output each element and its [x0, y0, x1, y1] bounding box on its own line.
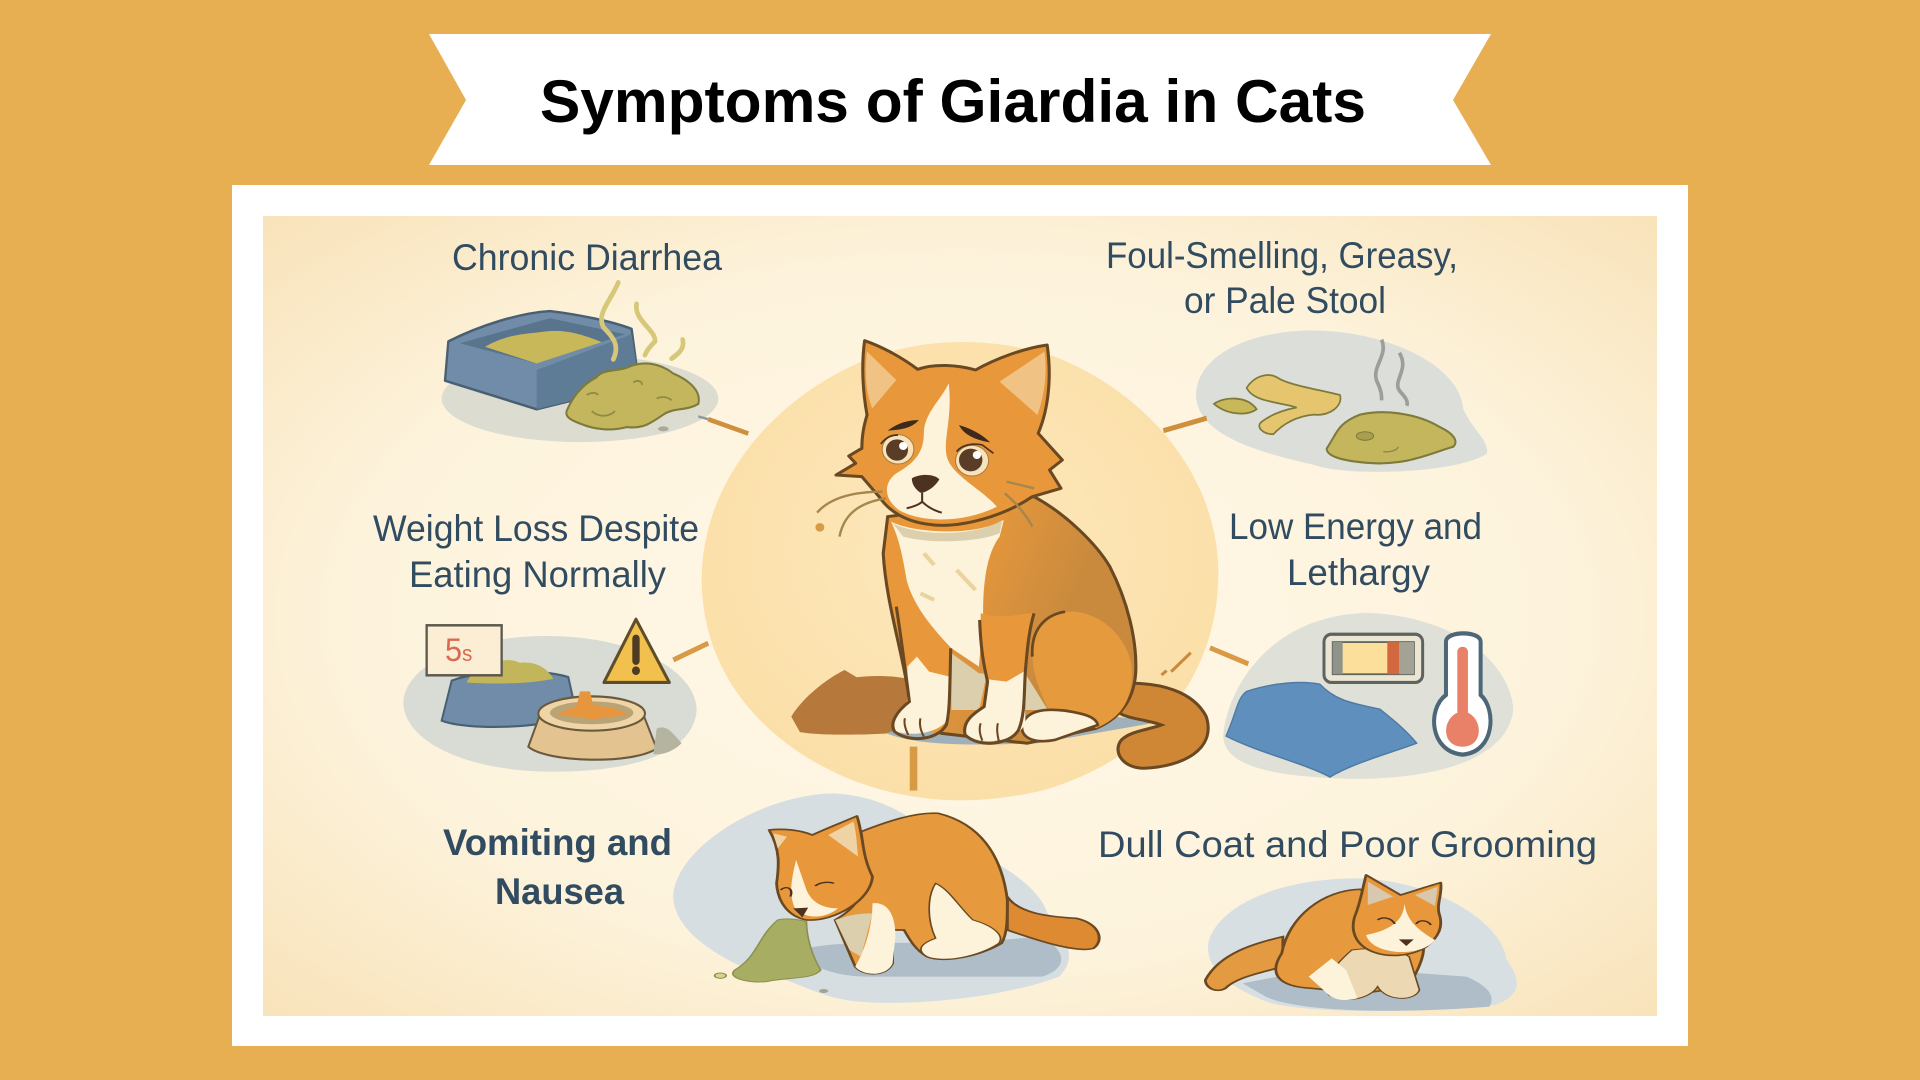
shadow	[801, 937, 1061, 977]
sign	[427, 625, 502, 675]
icon: vomiting cat	[673, 793, 1099, 1003]
head	[769, 816, 872, 920]
body	[835, 813, 1007, 974]
warning triangle	[604, 619, 669, 682]
icon: pale greasy stool	[1163, 330, 1487, 472]
symptom: vomiting	[443, 793, 1099, 1003]
symptom: low energy	[1210, 506, 1513, 779]
white frame panel	[232, 185, 1688, 1046]
label: foul stool: Foul-Smelling, Greasy,	[1106, 235, 1458, 276]
connector down	[903, 747, 925, 791]
icon: food bowls, sign and warning: 5s	[445, 631, 472, 668]
floor shadow	[886, 717, 1161, 745]
white face	[887, 383, 997, 519]
pillow	[1226, 683, 1417, 777]
chest marks	[920, 553, 976, 600]
left front leg	[898, 613, 951, 733]
nose and mouth	[907, 475, 942, 513]
inner ears	[866, 352, 1046, 415]
tail	[1007, 897, 1099, 949]
stool pile	[566, 363, 699, 429]
vomit	[733, 919, 821, 982]
chest fur	[891, 520, 1004, 667]
belly and leg white	[921, 883, 1000, 959]
symptom: weight loss	[373, 508, 708, 772]
pale stool streaks	[1247, 375, 1340, 434]
thermometer	[1434, 633, 1491, 755]
symptom: dull coat	[1098, 824, 1597, 1011]
stool pile	[1327, 412, 1455, 463]
symptom: chronic diarrhea	[442, 237, 748, 442]
right front leg	[976, 613, 1033, 727]
odor lines	[602, 282, 683, 359]
motion marks	[1161, 653, 1191, 675]
label: foul stool	[1106, 235, 1458, 321]
chest	[835, 913, 872, 957]
label: chronic diarrhea: Chronic Diarrhea	[452, 237, 722, 278]
whiskers	[817, 482, 1034, 537]
title banner	[429, 34, 1491, 165]
hind paw	[1022, 710, 1098, 741]
belly	[951, 653, 1048, 710]
torso	[883, 497, 1136, 743]
icon: food bowls, sign and warning	[403, 619, 708, 772]
brown lump	[791, 670, 914, 735]
eyes	[881, 421, 993, 476]
label: low energy: Low Energy and	[1229, 506, 1482, 547]
symptom: foul stool	[1106, 235, 1487, 472]
blue bowl	[442, 671, 577, 727]
label: vomiting: Nausea	[495, 871, 624, 912]
connector	[698, 416, 708, 419]
central cat illustration	[702, 341, 1218, 800]
cream illustration panel	[263, 216, 1657, 1016]
label: vomiting	[443, 822, 672, 912]
odor lines	[1376, 340, 1407, 406]
label: low energy	[1229, 506, 1482, 593]
label: low energy: Lethargy	[1287, 552, 1430, 593]
icon: pillow, battery, thermometer	[1210, 613, 1513, 779]
label: dull coat: Dull Coat and Poor Grooming	[1098, 824, 1597, 865]
tail	[1118, 683, 1208, 768]
tail	[1205, 937, 1283, 990]
head	[836, 341, 1062, 525]
icon: unkempt cat	[1205, 875, 1517, 1011]
battery	[1324, 634, 1423, 682]
head	[1353, 875, 1441, 955]
label: weight loss	[373, 508, 699, 595]
yellow disc behind cat	[702, 342, 1218, 800]
body	[1276, 889, 1424, 993]
collar shading	[893, 520, 1002, 541]
label: weight loss: Eating Normally	[409, 554, 666, 595]
label: vomiting: Vomiting and	[443, 822, 672, 863]
icon: litter box with stool	[442, 282, 748, 442]
haunch	[1032, 612, 1132, 728]
tan bowl	[528, 715, 657, 760]
title: Symptoms of Giardia in Cats	[540, 68, 1366, 135]
label: weight loss: Weight Loss Despite	[373, 508, 699, 549]
label: foul stool: or Pale Stool	[1184, 280, 1386, 321]
